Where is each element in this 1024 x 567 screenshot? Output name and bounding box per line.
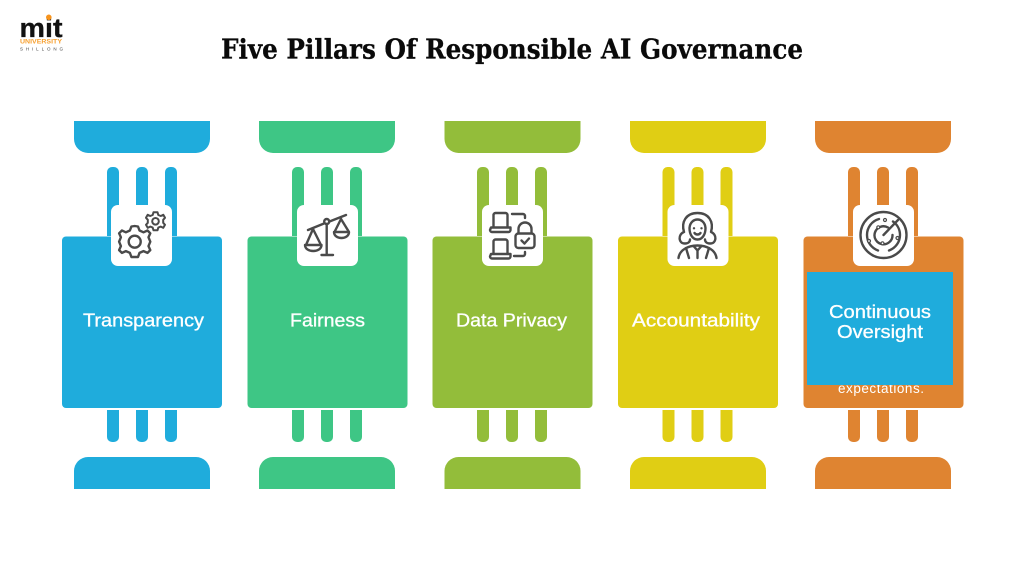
label: Continuous Oversight <box>829 302 931 342</box>
label: Data Privacy: Data Privacy <box>456 310 567 330</box>
title: Five Pillars Of Responsible AI Governance <box>221 34 803 66</box>
icon: person with wig <box>678 213 716 258</box>
panel: Fairness pillar <box>248 121 408 489</box>
label: Accountability: Accountability <box>632 310 760 330</box>
logo: MIT University Shillong: mit <box>20 13 63 43</box>
icon: balance scale <box>305 215 349 255</box>
panel: Transparency pillar <box>62 121 222 489</box>
panel: Continuous Oversight pillar <box>804 121 964 489</box>
text block: partially hidden description: expectations. <box>838 381 924 396</box>
logo: MIT University Shillong: SHILLONG <box>20 46 63 51</box>
panel: Accountability pillar <box>618 121 778 489</box>
overlay box: blue label panel <box>807 272 953 385</box>
icon: gears <box>119 212 165 257</box>
label: Continuous Oversight: Oversight <box>837 322 923 342</box>
icon: radar <box>860 212 906 258</box>
panel: Data Privacy pillar <box>432 121 592 489</box>
label: Fairness: Fairness <box>290 310 365 330</box>
logo: MIT University Shillong: UNIVERSITY <box>20 40 62 46</box>
label: Continuous Oversight: Continuous <box>829 302 931 322</box>
icon: laptops and padlock <box>490 213 534 258</box>
label: Transparency: Transparency <box>83 310 204 330</box>
